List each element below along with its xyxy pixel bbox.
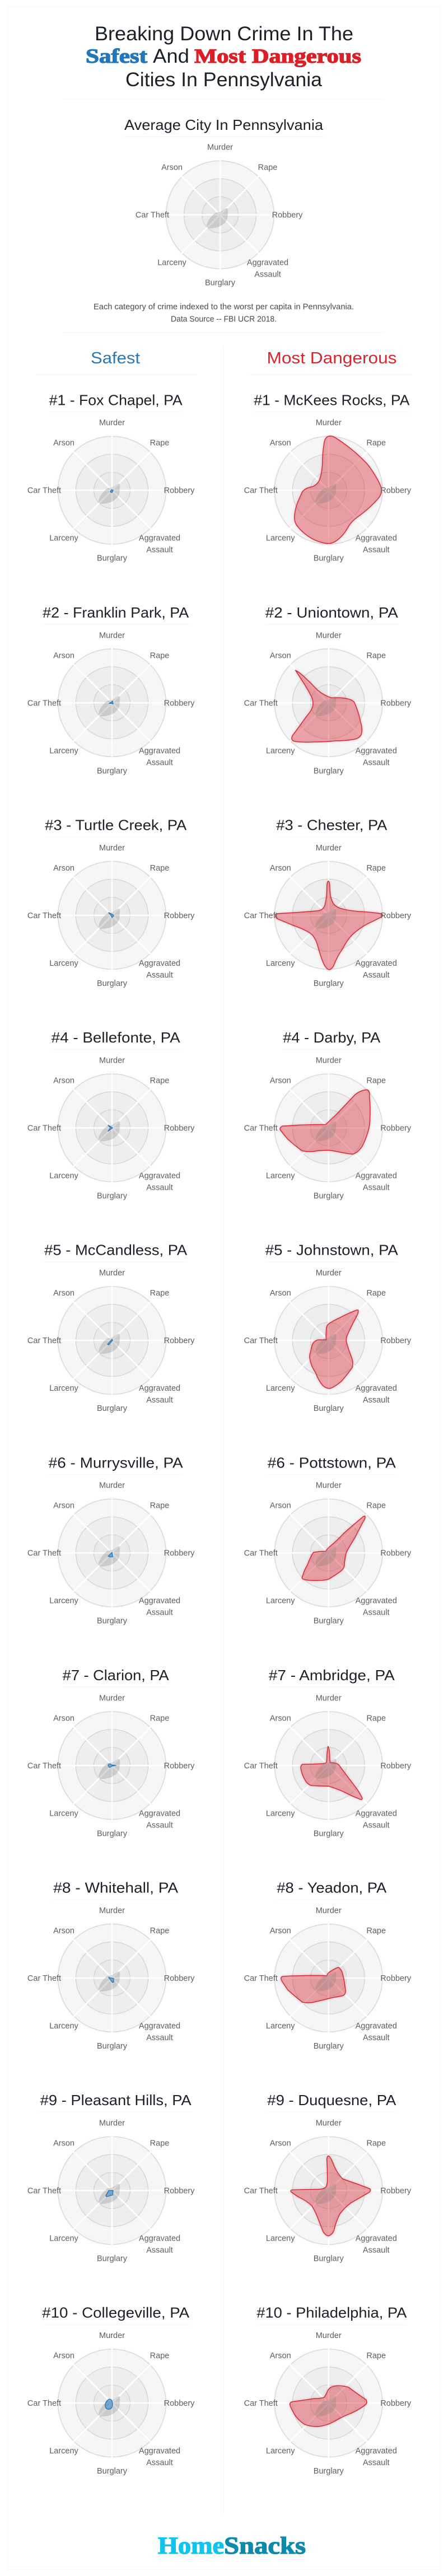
axis labels: Car Theft — [136, 211, 169, 220]
axis labels: Burglary — [314, 2467, 344, 2476]
axis labels: Aggravated — [356, 2447, 397, 2456]
axis labels: Aggravated — [247, 259, 288, 268]
axis labels: Murder — [316, 2331, 342, 2340]
axis labels: Car Theft — [244, 1336, 278, 1345]
axis labels: Assault — [146, 2458, 173, 2467]
panel: safest 8 Whitehall — [27, 1879, 195, 2051]
axis labels: Car Theft — [27, 2399, 61, 2408]
axis labels: Murder — [99, 2331, 125, 2340]
axis labels: Aggravated — [139, 2022, 180, 2031]
axis labels: Arson — [270, 1289, 291, 1298]
axis labels: Burglary — [97, 2467, 128, 2476]
axis labels: Assault — [363, 2033, 389, 2042]
axis labels: Rape — [150, 2351, 169, 2360]
axis labels: Aggravated — [356, 1171, 397, 1180]
radar chart — [27, 419, 195, 563]
axis labels — [27, 1906, 195, 2051]
axis labels: Murder — [316, 631, 342, 640]
heading: #7 - Ambridge, PA — [269, 1667, 395, 1684]
axis labels: Burglary — [97, 1829, 128, 1838]
panel: safest 10 Collegeville — [27, 2304, 195, 2476]
axis labels: Aggravated — [139, 2447, 180, 2456]
axis labels: Murder — [99, 2119, 125, 2128]
axis labels: Larceny — [266, 2022, 295, 2031]
axis labels: Assault — [363, 1609, 389, 1617]
axis labels: Robbery — [272, 211, 303, 220]
axis labels: Car Theft — [27, 2187, 61, 2196]
heading: #7 - Clarion, PA — [63, 1667, 169, 1684]
radar chart — [27, 1056, 195, 1200]
axis labels: Aggravated — [356, 1384, 397, 1393]
heading: #5 - Johnstown, PA — [265, 1242, 398, 1259]
axis labels: Arson — [270, 1076, 291, 1085]
panel: safest 1 Fox Chapel — [27, 391, 195, 563]
axis labels — [27, 2331, 195, 2476]
panel: dangerous 10 Philadelphia — [244, 2304, 412, 2476]
radar: average city — [136, 143, 303, 288]
axis labels: Arson — [53, 1714, 74, 1723]
radar chart — [27, 2119, 195, 2263]
axis labels: Arson — [270, 1502, 291, 1511]
axis labels: Larceny — [266, 1809, 295, 1818]
title: Cities In Pennsylvania — [125, 69, 323, 91]
radar chart — [244, 2331, 412, 2476]
axis labels: Larceny — [266, 1384, 295, 1393]
title: Most Dangerous — [194, 45, 361, 67]
axis labels: Murder — [99, 1906, 125, 1915]
axis labels: Murder — [99, 844, 125, 853]
axis labels: Larceny — [266, 746, 295, 755]
axis labels: Murder — [316, 1481, 342, 1490]
radar chart — [244, 1481, 412, 1626]
axis labels — [27, 2119, 195, 2263]
axis labels: Burglary — [314, 2042, 344, 2051]
axis labels: Burglary — [97, 1191, 128, 1200]
axis labels: Aggravated — [356, 746, 397, 755]
axis labels: Rape — [150, 1502, 169, 1511]
axis labels: Robbery — [380, 1761, 412, 1770]
axis labels: Robbery — [380, 911, 412, 920]
axis labels — [244, 631, 412, 775]
axis labels: Burglary — [97, 1404, 128, 1413]
axis labels: Rape — [366, 2351, 386, 2360]
axis labels: Assault — [363, 2246, 389, 2255]
panel: safest 7 Clarion — [27, 1667, 195, 1838]
panel: dangerous 8 Yeadon — [244, 1879, 412, 2051]
axis labels: Aggravated — [139, 1809, 180, 1818]
axis labels: Assault — [363, 2458, 389, 2467]
axis labels: Robbery — [380, 1124, 412, 1133]
axis labels: Robbery — [164, 487, 195, 495]
panel: safest 4 Bellefonte — [27, 1029, 195, 1200]
axis labels: Aggravated — [139, 959, 180, 968]
axis labels: Murder — [207, 143, 233, 152]
axis labels: Assault — [146, 758, 173, 767]
axis labels: Rape — [366, 1714, 386, 1723]
panel: safest 6 Murrysville — [27, 1454, 195, 1626]
axis labels — [244, 1906, 412, 2051]
axis labels: Burglary — [314, 1617, 344, 1626]
radar chart — [244, 1694, 412, 1838]
panel: safest 5 McCandless — [27, 1242, 195, 1413]
axis labels: Robbery — [164, 699, 195, 708]
radar chart — [244, 844, 412, 988]
axis labels: Robbery — [380, 1336, 412, 1345]
axis labels: Car Theft — [244, 1124, 278, 1133]
axis labels: Murder — [316, 2119, 342, 2128]
axis labels: Arson — [53, 1076, 74, 1085]
heading: #9 - Pleasant Hills, PA — [40, 2092, 192, 2109]
axis labels: Rape — [366, 1289, 386, 1298]
axis labels: Car Theft — [244, 1549, 278, 1558]
axis labels — [244, 2331, 412, 2476]
axis labels: Burglary — [205, 279, 236, 288]
axis labels: Burglary — [97, 1617, 128, 1626]
axis labels: Larceny — [49, 534, 79, 543]
radar chart — [244, 1056, 412, 1200]
axis labels: Rape — [366, 651, 386, 660]
data source note: Data Source -- FBI UCR 2018. — [171, 315, 277, 324]
axis labels: Arson — [53, 439, 74, 448]
panel: dangerous 2 Uniontown — [244, 604, 412, 775]
heading: #4 - Bellefonte, PA — [52, 1029, 180, 1046]
axis labels: Arson — [53, 1502, 74, 1511]
axis labels: Rape — [366, 1076, 386, 1085]
axis labels: Car Theft — [244, 911, 278, 920]
radar chart — [244, 1269, 412, 1413]
axis labels: Burglary — [314, 554, 344, 563]
axis labels: Rape — [150, 1714, 169, 1723]
radar chart — [27, 2331, 195, 2476]
axis labels: Rape — [366, 864, 386, 873]
axis labels: Burglary — [314, 1829, 344, 1838]
axis labels — [244, 1694, 412, 1838]
axis labels: Burglary — [97, 554, 128, 563]
axis labels: Murder — [316, 419, 342, 428]
heading: #1 - McKees Rocks, PA — [254, 391, 410, 408]
axis labels — [244, 1269, 412, 1413]
radar chart — [27, 1906, 195, 2051]
axis labels: Car Theft — [27, 1974, 61, 1983]
heading: #10 - Philadelphia, PA — [256, 2304, 407, 2321]
axis labels: Larceny — [49, 1171, 79, 1180]
heading: #2 - Franklin Park, PA — [43, 604, 189, 621]
axis labels: Murder — [99, 419, 125, 428]
axis labels: Arson — [270, 864, 291, 873]
panel: dangerous 9 Duquesne — [244, 2092, 412, 2263]
heading: #6 - Pottstown, PA — [268, 1454, 396, 1471]
axis labels: Assault — [146, 2033, 173, 2042]
logo: HomeSnacks: Home — [158, 2533, 224, 2559]
axis labels: Robbery — [380, 2187, 412, 2196]
axis labels: Rape — [150, 1927, 169, 1935]
axis labels — [244, 1056, 412, 1200]
axis labels: Aggravated — [356, 1597, 397, 1606]
axis labels — [27, 419, 195, 563]
axis labels — [27, 631, 195, 775]
axis labels: Aggravated — [139, 1384, 180, 1393]
axis labels: Car Theft — [244, 1761, 278, 1770]
axis labels — [244, 1481, 412, 1626]
column heading: most dangerous: Most Dangerous — [267, 349, 396, 367]
heading: #3 - Turtle Creek, PA — [45, 816, 187, 833]
axis labels: Murder — [316, 844, 342, 853]
title — [86, 23, 361, 91]
heading: #4 - Darby, PA — [283, 1029, 381, 1046]
panel: dangerous 5 Johnstown — [244, 1242, 412, 1413]
heading: #8 - Yeadon, PA — [277, 1879, 387, 1896]
axis labels — [27, 1481, 195, 1626]
axis labels: Robbery — [164, 1336, 195, 1345]
axis labels: Burglary — [314, 979, 344, 988]
axis labels: Burglary — [97, 979, 128, 988]
axis labels: Larceny — [266, 534, 295, 543]
axis labels: Car Theft — [27, 1336, 61, 1345]
axis labels: Car Theft — [27, 1124, 61, 1133]
axis labels — [27, 1269, 195, 1413]
radar chart — [244, 2119, 412, 2263]
logo: HomeSnacks — [158, 2533, 306, 2559]
axis labels: Rape — [150, 1289, 169, 1298]
heading: #6 - Murrysville, PA — [49, 1454, 183, 1471]
axis labels: Larceny — [266, 959, 295, 968]
axis labels: Burglary — [314, 766, 344, 775]
axis labels: Rape — [150, 2139, 169, 2148]
axis labels: Assault — [254, 270, 281, 279]
axis labels: Assault — [146, 1396, 173, 1405]
axis labels: Arson — [270, 1714, 291, 1723]
axis labels: Car Theft — [244, 2187, 278, 2196]
axis labels: Assault — [363, 1821, 389, 1830]
axis labels: Assault — [146, 1821, 173, 1830]
axis labels: Aggravated — [139, 746, 180, 755]
axis labels: Robbery — [380, 487, 412, 495]
axis labels: Burglary — [97, 2254, 128, 2263]
axis labels: Aggravated — [356, 2234, 397, 2243]
panel: safest 3 Turtle Creek — [27, 816, 195, 988]
axis labels: Larceny — [49, 1384, 79, 1393]
axis labels: Assault — [146, 971, 173, 980]
axis labels: Robbery — [164, 2187, 195, 2196]
axis labels: Assault — [363, 1184, 389, 1193]
axis labels: Rape — [366, 2139, 386, 2148]
axis labels: Car Theft — [244, 487, 278, 495]
axis labels: Robbery — [380, 2399, 412, 2408]
title: Breaking Down Crime In The — [95, 23, 353, 45]
axis labels: Larceny — [49, 2234, 79, 2243]
axis labels: Arson — [270, 439, 291, 448]
axis labels: Murder — [99, 1694, 125, 1703]
axis labels — [244, 2119, 412, 2263]
axis labels: Arson — [53, 1289, 74, 1298]
heading: average city: Average City In Pennsylvania — [124, 116, 324, 133]
axis labels: Car Theft — [27, 487, 61, 495]
axis labels: Assault — [146, 2246, 173, 2255]
axis labels: Larceny — [49, 2022, 79, 2031]
axis labels: Arson — [161, 163, 183, 172]
panel: dangerous 1 McKees Rocks — [244, 391, 412, 563]
axis labels: Rape — [366, 1502, 386, 1511]
data source note: Each category of crime indexed to the worst per capita in Pennsylvania. — [94, 302, 354, 311]
axis labels: Car Theft — [27, 911, 61, 920]
title: Safest — [86, 45, 147, 67]
axis labels: Aggravated — [139, 534, 180, 543]
radar chart — [27, 1481, 195, 1626]
axis labels: Car Theft — [27, 1549, 61, 1558]
axis labels: Assault — [363, 1396, 389, 1405]
axis labels: Robbery — [380, 1974, 412, 1983]
axis labels: Murder — [316, 1906, 342, 1915]
axis labels: Robbery — [164, 1761, 195, 1770]
axis labels: Rape — [150, 651, 169, 660]
axis labels: Larceny — [49, 1597, 79, 1606]
axis labels: Rape — [366, 439, 386, 448]
axis labels: Aggravated — [356, 534, 397, 543]
axis labels: Murder — [316, 1056, 342, 1065]
axis labels: Car Theft — [244, 1974, 278, 1983]
axis labels: Arson — [270, 2139, 291, 2148]
title: And — [153, 45, 189, 67]
axis labels — [27, 1694, 195, 1838]
axis labels: Burglary — [97, 2042, 128, 2051]
axis labels: Arson — [53, 864, 74, 873]
axis labels: Robbery — [164, 1974, 195, 1983]
axis labels — [244, 844, 412, 988]
axis labels: Larceny — [49, 1809, 79, 1818]
axis labels — [136, 143, 303, 288]
axis labels: Aggravated — [139, 1171, 180, 1180]
axis labels: Larceny — [266, 1171, 295, 1180]
column heading: safest: Safest — [91, 349, 140, 367]
axis labels: Murder — [99, 1056, 125, 1065]
radar chart — [27, 1694, 195, 1838]
axis labels: Murder — [316, 1269, 342, 1278]
radar chart — [244, 1906, 412, 2051]
radar chart — [27, 631, 195, 775]
axis labels: Assault — [363, 971, 389, 980]
axis labels: Robbery — [164, 1549, 195, 1558]
axis labels: Burglary — [314, 1404, 344, 1413]
radar chart — [27, 844, 195, 988]
axis labels: Aggravated — [139, 2234, 180, 2243]
axis labels: Larceny — [157, 259, 187, 268]
axis labels: Car Theft — [27, 1761, 61, 1770]
axis labels: Aggravated — [356, 959, 397, 968]
axis labels: Murder — [99, 631, 125, 640]
axis labels: Car Theft — [244, 2399, 278, 2408]
axis labels: Rape — [150, 1076, 169, 1085]
axis labels: Burglary — [314, 2254, 344, 2263]
axis labels: Arson — [270, 1927, 291, 1935]
axis labels: Robbery — [380, 1549, 412, 1558]
axis labels: Aggravated — [356, 2022, 397, 2031]
axis labels: Arson — [53, 2351, 74, 2360]
axis labels: Rape — [150, 864, 169, 873]
panel: safest 2 Franklin Park — [27, 604, 195, 775]
radar chart — [244, 419, 412, 563]
axis labels: Murder — [316, 1694, 342, 1703]
panel: dangerous 7 Ambridge — [244, 1667, 412, 1838]
axis labels: Burglary — [314, 1191, 344, 1200]
axis labels: Assault — [363, 758, 389, 767]
axis labels: Larceny — [266, 2234, 295, 2243]
axis labels: Robbery — [164, 2399, 195, 2408]
axis labels: Arson — [270, 2351, 291, 2360]
axis labels: Robbery — [164, 1124, 195, 1133]
axis labels: Rape — [258, 163, 277, 172]
axis labels: Assault — [146, 546, 173, 555]
axis labels: Assault — [146, 1609, 173, 1617]
axis labels: Rape — [366, 1927, 386, 1935]
axis labels: Car Theft — [244, 699, 278, 708]
axis labels: Robbery — [164, 911, 195, 920]
axis labels: Car Theft — [27, 699, 61, 708]
panel: average city — [94, 116, 354, 324]
heading: #8 - Whitehall, PA — [53, 1879, 179, 1896]
heading: #1 - Fox Chapel, PA — [49, 391, 183, 408]
axis labels — [244, 419, 412, 563]
panel: dangerous 4 Darby — [244, 1029, 412, 1200]
panel: safest 9 Pleasant Hills — [27, 2092, 195, 2263]
axis labels: Aggravated — [139, 1597, 180, 1606]
heading: #9 - Duquesne, PA — [267, 2092, 396, 2109]
axis labels: Arson — [270, 651, 291, 660]
heading: #3 - Chester, PA — [276, 816, 388, 833]
heading: #2 - Uniontown, PA — [265, 604, 398, 621]
axis labels — [27, 844, 195, 988]
axis labels: Rape — [150, 439, 169, 448]
axis labels: Assault — [146, 1184, 173, 1193]
axis labels: Murder — [99, 1481, 125, 1490]
axis labels — [27, 1056, 195, 1200]
radar chart — [244, 631, 412, 775]
axis labels: Larceny — [266, 2447, 295, 2456]
panel: dangerous 3 Chester — [244, 816, 412, 988]
axis labels: Larceny — [49, 959, 79, 968]
axis labels: Arson — [53, 651, 74, 660]
heading: #5 - McCandless, PA — [44, 1242, 188, 1259]
axis labels: Larceny — [266, 1597, 295, 1606]
heading: #10 - Collegeville, PA — [42, 2304, 190, 2321]
axis labels: Arson — [53, 1927, 74, 1935]
axis labels: Robbery — [380, 699, 412, 708]
radar chart — [27, 1269, 195, 1413]
axis labels: Murder — [99, 1269, 125, 1278]
axis labels: Arson — [53, 2139, 74, 2148]
axis labels: Burglary — [97, 766, 128, 775]
axis labels: Larceny — [49, 2447, 79, 2456]
panel: dangerous 6 Pottstown — [244, 1454, 412, 1626]
axis labels: Larceny — [49, 746, 79, 755]
data source note — [94, 302, 354, 324]
logo: HomeSnacks: Snacks — [224, 2533, 306, 2559]
axis labels: Assault — [363, 546, 389, 555]
axis labels: Aggravated — [356, 1809, 397, 1818]
